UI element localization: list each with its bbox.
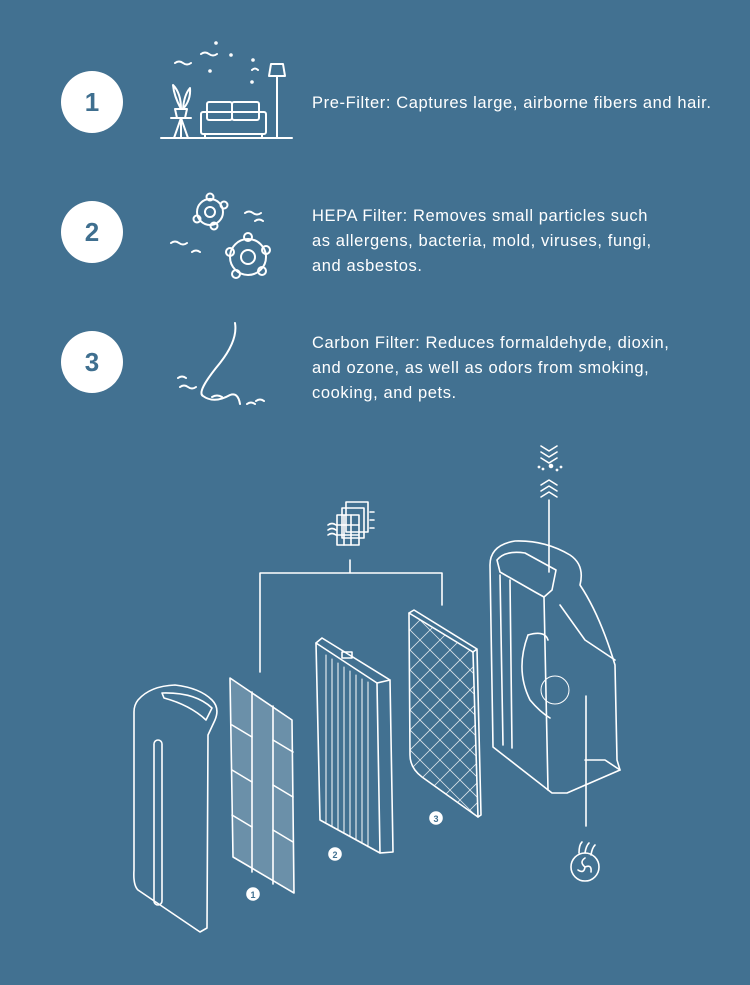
number badge 2: 2 [85, 217, 99, 247]
icon: particles [171, 194, 270, 278]
label 1: 1 [250, 890, 256, 900]
label 3 [430, 812, 442, 824]
text: pre-filter: Pre-Filter: Captures large, airborne fibers and hair. [312, 94, 712, 112]
text: HEPA filter: as allergens, bacteria, mold, viruses, fungi, [312, 232, 652, 250]
text: HEPA filter: HEPA Filter: Removes small particles such [312, 207, 648, 225]
text: carbon filter [312, 334, 669, 402]
filter 1: pre-filter [230, 678, 294, 893]
number badge 1 [61, 71, 123, 133]
filter 2: HEPA [316, 638, 393, 853]
number badge 3: 3 [85, 347, 99, 377]
text: HEPA filter: and asbestos. [312, 257, 423, 275]
pointer line to fan [585, 696, 587, 826]
number badge 2 [61, 201, 123, 263]
label 3: 3 [433, 814, 439, 824]
front cover [134, 685, 217, 932]
icon: layered filter [328, 502, 374, 545]
number badge 3 [61, 331, 123, 393]
text: carbon filter: cooking, and pets. [312, 384, 457, 402]
label 2 [329, 848, 341, 860]
number badge 1: 1 [85, 87, 99, 117]
filter 3: carbon [408, 609, 482, 818]
main unit [490, 541, 620, 793]
icon: fan [571, 842, 599, 881]
pointer line to control panel [548, 500, 550, 572]
text: carbon filter: Carbon Filter: Reduces formaldehyde, dioxin, [312, 334, 669, 352]
label 2: 2 [332, 850, 338, 860]
icon: nose [178, 323, 264, 404]
icon: air out [538, 446, 562, 497]
icon: living room [161, 42, 292, 138]
illustrations [133, 41, 621, 933]
text: HEPA filter [312, 207, 652, 275]
text: carbon filter: and ozone, as well as odors from smoking, [312, 359, 649, 377]
bracket connecting filters [260, 560, 442, 672]
label 1 [247, 888, 259, 900]
